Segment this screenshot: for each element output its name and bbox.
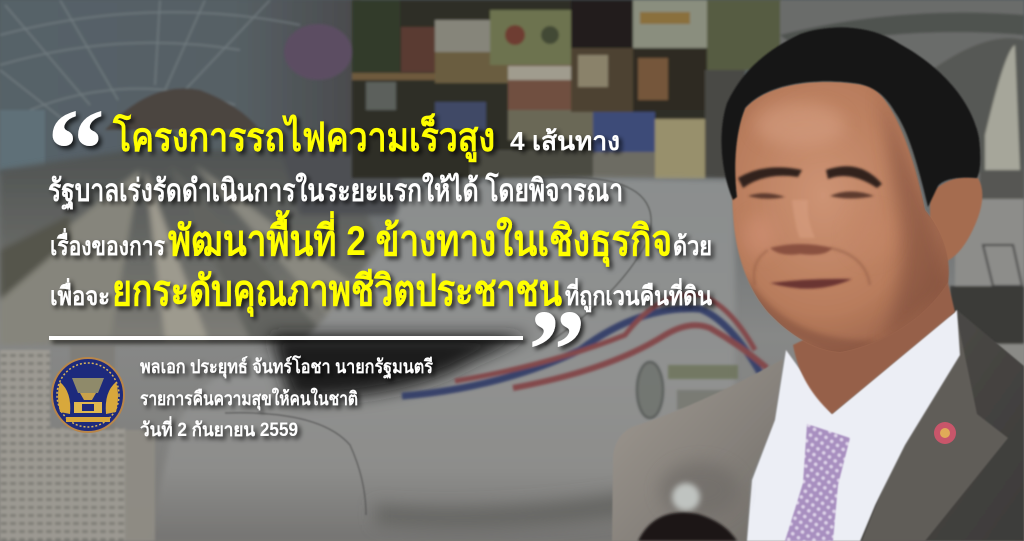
line 2: รัฐบาลเร่งรัดดำเนินการในระยะแรกให้ได้ โดยพิจารณา (48, 172, 623, 211)
quote text block (47, 86, 712, 415)
speaker name: พลเอก ประยุทธ์ จันทร์โอชา นายกรัฐมนตรี (140, 355, 434, 380)
opening quote mark: “ (47, 86, 105, 214)
lapel pin (934, 422, 956, 444)
camera in foreground (638, 513, 737, 541)
portrait: Prime Minister (612, 27, 1024, 541)
attribution text (140, 355, 434, 441)
line 4 tail: ที่ถูกเวนคืนที่ดิน (565, 277, 712, 313)
line 4 lead: เพื่อจะ (50, 277, 110, 311)
high-speed train body (150, 178, 735, 541)
suit left (612, 359, 783, 541)
line 3 tail: ด้วย (673, 231, 712, 261)
headline line 1: โครงการรถไฟความเร็วสูง (112, 112, 495, 162)
suit right lapel (862, 318, 1008, 541)
platform tracks (0, 150, 420, 345)
line 1 route count: 4 เส้นทาง (510, 126, 620, 156)
ear (930, 177, 982, 262)
train flag stripes (402, 294, 767, 396)
eyebrows, eyes, nose and mouth (738, 166, 882, 289)
date: วันที่ 2 กันยายน 2559 (140, 416, 298, 441)
necktie (785, 424, 850, 541)
divider rule (49, 336, 523, 340)
shirt (747, 310, 960, 541)
dark smears on train (225, 177, 651, 528)
programme name: รายการคืนความสุขให้คนในชาติ (140, 387, 358, 411)
camera highlight (672, 483, 700, 511)
line 4 highlight: ยกระดับคุณภาพชีวิตประชาชน (112, 267, 562, 317)
neck (793, 270, 955, 414)
face shading (744, 90, 950, 360)
hair (721, 27, 980, 207)
station roof (0, 0, 360, 175)
line 3 highlight: พัฒนาพื้นที่ 2 ข้างทางในเชิงธุรกิจ (168, 209, 672, 267)
closing quote mark: ” (528, 287, 586, 415)
line 3 lead: เรื่องของการ (50, 227, 165, 261)
train emblem (637, 362, 738, 418)
collage photos (284, 0, 782, 179)
government seal (52, 358, 124, 432)
face (732, 82, 949, 352)
suit right (860, 310, 1024, 541)
city buildings (0, 345, 155, 541)
suit smudge (660, 462, 740, 518)
right train roof (780, 0, 1024, 368)
